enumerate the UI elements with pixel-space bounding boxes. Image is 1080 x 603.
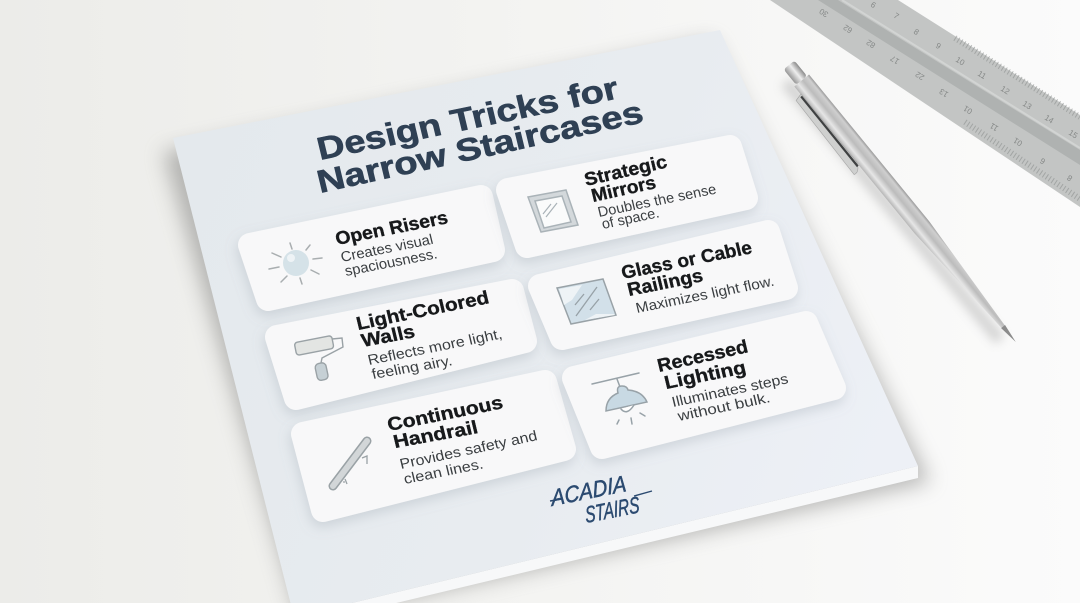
text: Light-Colored Walls: Light-Colored [354,286,491,334]
ruler: 8 [912,27,921,37]
text: Glass or Cable Railings [619,236,776,317]
text: Recessed Lighting: Illuminates steps [670,371,790,411]
text: Continuous Handrail: Provides safety and [398,428,539,473]
icon: paint roller [294,335,343,381]
text: Open Risers [333,206,450,280]
text: Light-Colored Walls [354,286,504,383]
text: Continuous Handrail: Handrail [391,416,480,452]
ruler [770,0,1080,207]
text: Glass or Cable Railings: Railings [625,264,705,300]
text: Strategic Mirrors: Mirrors [589,171,658,206]
text: Strategic Mirrors: of space. [600,205,661,233]
title [313,70,647,200]
pen [774,59,1023,354]
text: Light-Colored Walls: feeling airy. [370,353,454,383]
card background [277,291,525,398]
paper shadow [163,40,930,603]
panel: paper sheet [173,30,918,603]
ruler: 30 [817,6,830,19]
text: Recessed Lighting: Recessed [655,335,750,376]
card: Light-Colored Walls [277,286,525,398]
ruler: 8 [1065,173,1074,183]
icon: glass panel [557,279,616,324]
ruler: 01 [1011,135,1024,148]
text: Recessed Lighting: Lighting [662,356,748,393]
ruler: 15 [1067,128,1080,141]
ruler: 6 [1038,156,1047,166]
ruler: 11 [976,69,988,81]
text: Continuous Handrail [385,391,539,488]
ruler: 22 [913,69,926,82]
text: Open Risers: Creates visual [339,232,435,266]
text: Open Risers: Open Risers [333,206,450,249]
ruler: 12 [999,84,1012,97]
card background [250,197,493,299]
ruler: 7 [892,11,901,21]
text: Strategic Mirrors: Strategic [582,151,669,190]
card: Recessed Lighting [574,323,834,447]
card background [574,323,834,447]
ruler: 14 [1043,113,1056,126]
ruler: 17 [888,53,901,66]
card: Open Risers [250,197,493,299]
text: Glass or Cable Railings: Glass or Cable [619,236,754,283]
card: Continuous Handrail [303,382,564,510]
icon: handrail [333,441,367,486]
ruler: 11 [988,121,1000,133]
ruler: 62 [841,22,854,35]
card background [303,382,564,510]
card background [540,232,786,338]
text: Light-Colored Walls: Reflects more light, [366,326,504,369]
text: Continuous Handrail: Continuous [385,391,505,435]
text: Recessed Lighting [655,335,790,425]
text: Continuous Handrail: clean lines. [402,456,485,488]
text: Recessed Lighting: without bulk. [675,390,772,425]
text: Open Risers: spaciousness. [343,246,439,280]
logo: Acadia Stairs [548,470,652,528]
ruler: 01 [961,103,974,116]
ruler: 13 [937,86,950,99]
logo: Acadia Stairs: STAIRS [584,491,641,528]
ruler: 10 [954,55,967,68]
ruler: 13 [1021,99,1034,112]
icon: mirror [528,190,578,232]
title: Design Tricks for [313,70,622,167]
title: Narrow Staircases [313,94,647,200]
card: Glass or Cable Railings [540,232,786,338]
ruler: 6 [869,0,878,10]
card: Strategic Mirrors [508,147,746,246]
text: Strategic Mirrors [582,151,718,233]
card background [508,147,746,246]
ruler: 9 [934,41,943,51]
icon: sun [269,243,322,284]
text: Light-Colored Walls: Walls [359,320,417,351]
ruler: 82 [864,37,877,50]
text: Glass or Cable Railings: Maximizes light flow. [634,274,776,317]
icon: pendant lamp [592,373,647,424]
text: Strategic Mirrors: Doubles the sense [596,182,718,221]
logo: Acadia Stairs: ACADIA [548,470,627,511]
